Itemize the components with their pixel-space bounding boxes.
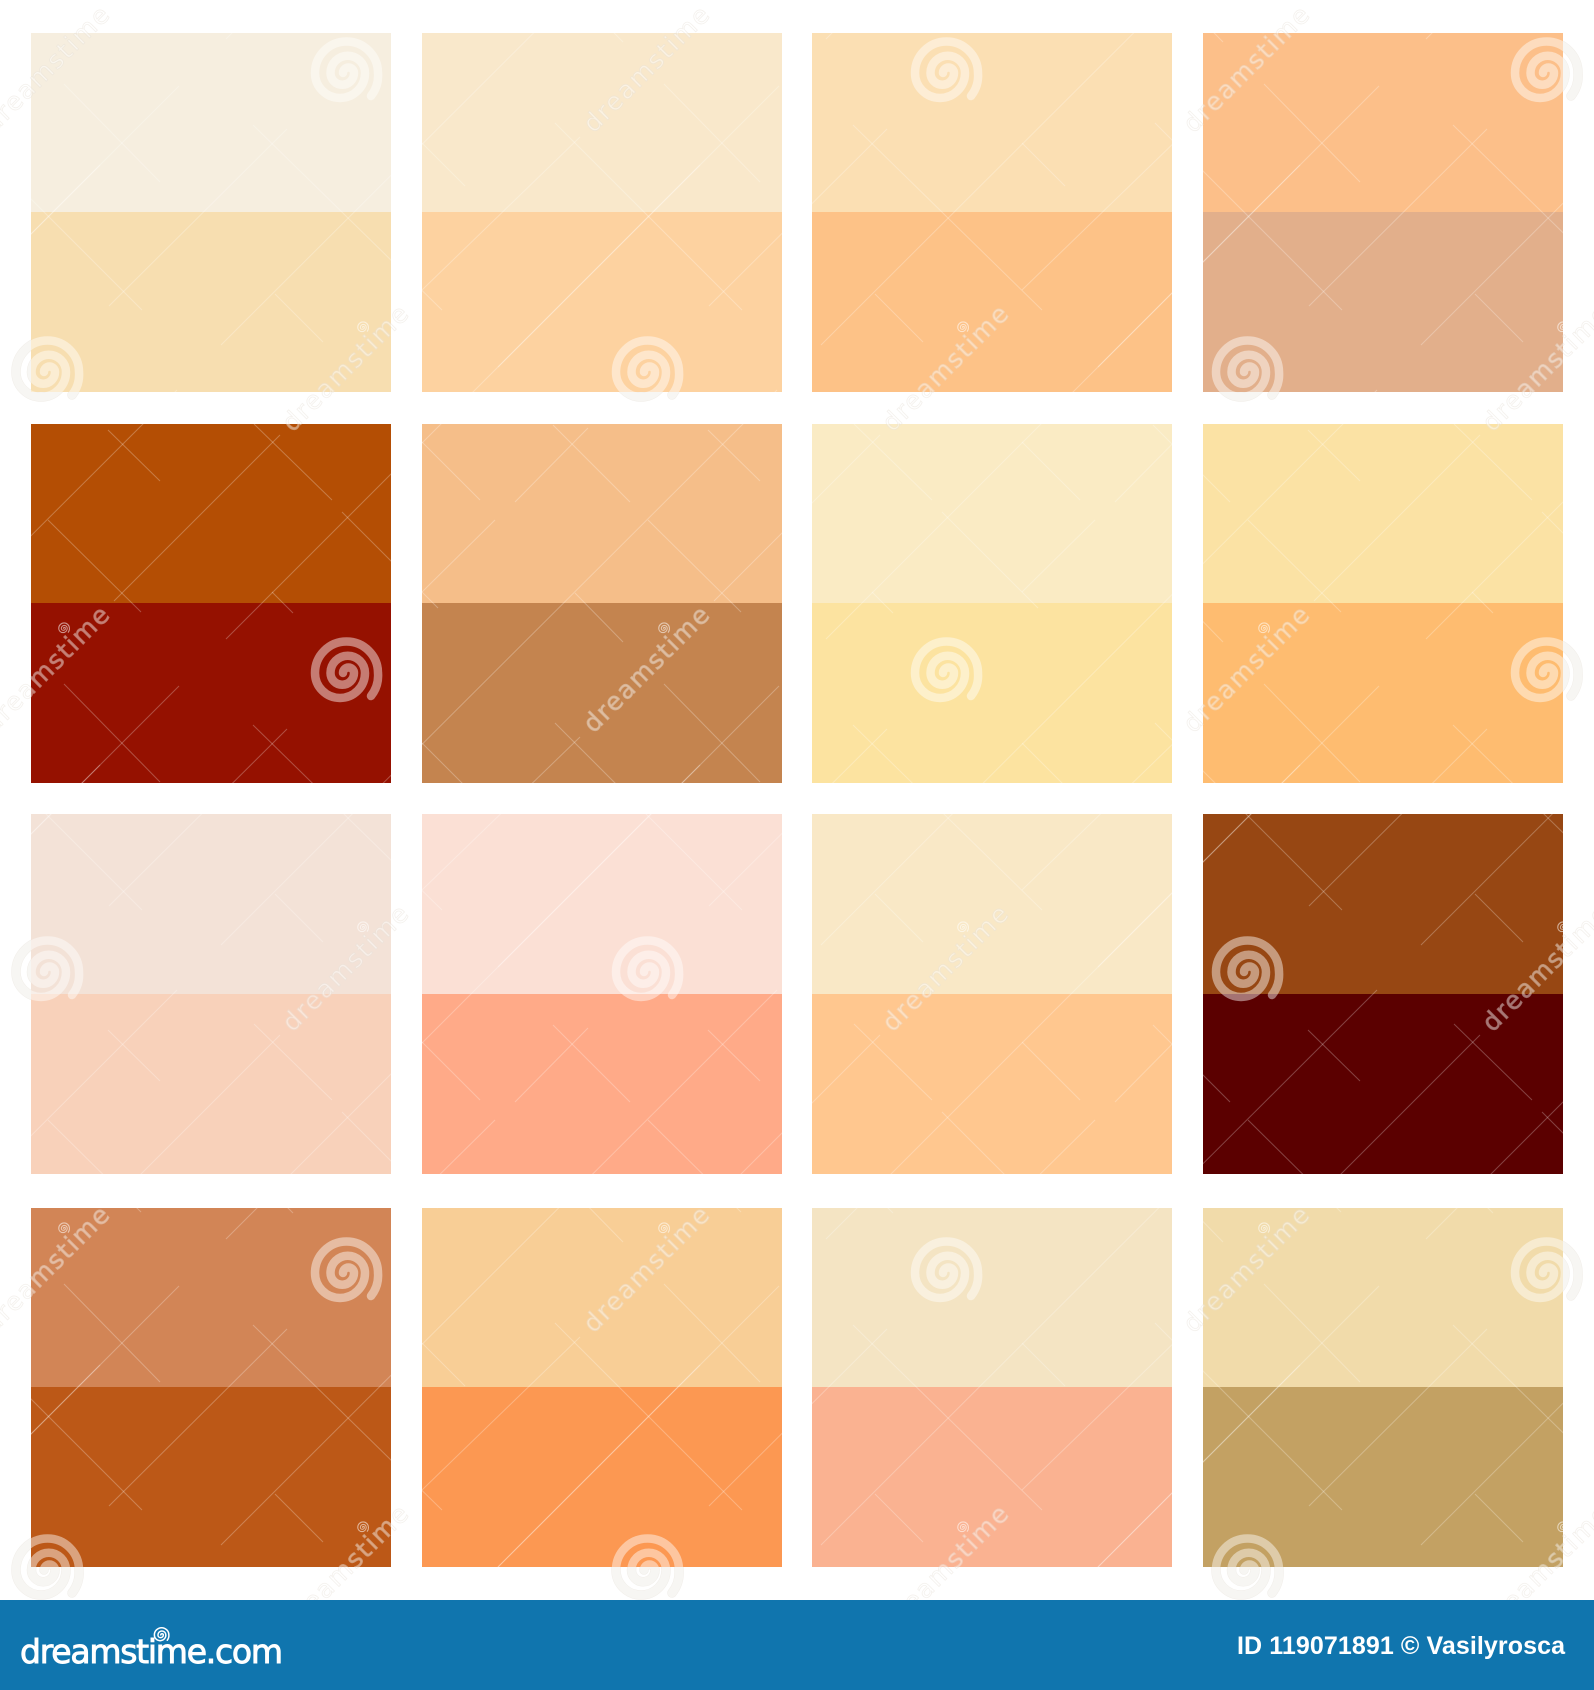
icon: logo spiral: [154, 1628, 169, 1641]
panel: swatch row 4 column 1: [31, 1208, 391, 1567]
watermark text: dreamstime: [577, 1200, 715, 1338]
watermark text: dreamstime: [577, 0, 715, 138]
panel: swatch row 1 column 3: [812, 33, 1172, 392]
panel: swatch row 4 column 3: [812, 1208, 1172, 1567]
panel: swatch row 3 column 1: [31, 814, 391, 1174]
panel: swatch row 2 column 2: [422, 424, 782, 783]
logo text: dreamstime.com: [20, 1632, 283, 1671]
panel: swatch row 2 column 3: [812, 424, 1172, 783]
watermark text: dreamstime: [577, 600, 715, 738]
panel: swatch row 2 column 1: [31, 424, 391, 783]
watermark text: dreamstime: [276, 1499, 414, 1637]
panel: swatch row 4 column 4: [1203, 1208, 1563, 1567]
panel: swatch row 1 column 2: [422, 33, 782, 392]
watermark text: dreamstime: [1177, 600, 1315, 738]
panel: swatch row 3 column 4: [1203, 814, 1563, 1174]
watermark text: dreamstime: [876, 899, 1014, 1037]
panel: swatch row 3 column 3: [812, 814, 1172, 1174]
watermark text: dreamstime: [276, 899, 414, 1037]
watermark text: dreamstime: [876, 1499, 1014, 1637]
panel: swatch row 3 column 2: [422, 814, 782, 1174]
watermark text: dreamstime: [276, 299, 414, 437]
watermark text: dreamstime: [1177, 0, 1315, 138]
panel: swatch row 1 column 1: [31, 33, 391, 392]
panel: swatch row 1 column 4: [1203, 33, 1563, 392]
watermark text: dreamstime: [876, 299, 1014, 437]
footer bar: [0, 1600, 1594, 1690]
watermark text: dreamstime: [1177, 1200, 1315, 1338]
panel: swatch row 4 column 2: [422, 1208, 782, 1567]
image id and credit: ID 119071891 © Vasilyrosca: [1237, 1632, 1566, 1660]
panel: swatch row 2 column 4: [1203, 424, 1563, 783]
